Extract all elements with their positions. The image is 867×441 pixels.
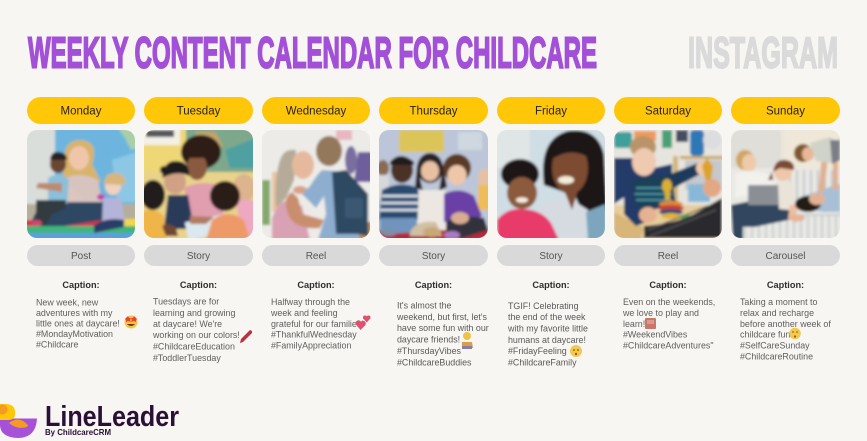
caption: Saturday: Caption: [649,280,687,290]
icon: book [645,318,656,329]
photo: Friday mother and daughter smiling [495,128,607,240]
caption: Thursday [396,280,489,368]
day: Thursday: Thursday [410,106,458,118]
logo wordmark: LineLeader [45,401,179,433]
caption: Wednesday: grateful for our families! [271,319,364,329]
caption: Tuesday [152,280,252,363]
day: Sunday [731,97,840,124]
photo: Monday teacher with toddlers [25,128,137,240]
caption: Saturday [622,280,715,350]
type: Story [497,245,605,266]
photo: Wednesday parent greeting child with backpack [260,128,372,240]
caption: Monday [36,280,138,350]
day: Sunday: Sunday [766,106,805,118]
day: Monday [27,97,135,124]
type: Story: Story [422,251,445,262]
caption: Wednesday: #FamilyAppreciation [271,340,351,350]
day: Tuesday [144,97,253,124]
logo mark [0,404,37,438]
type: Post: Post [71,251,91,262]
day: Wednesday: Wednesday [286,106,347,118]
day: Wednesday [262,97,370,124]
type: Post [27,245,135,266]
caption: Monday: little ones at daycare! [36,318,120,328]
caption: Tuesday: #ToddlerTuesday [153,353,221,363]
caption: Tuesday: working on our colors! [152,330,240,340]
photo: Sunday family on the sofa [729,128,842,241]
caption: Thursday: Caption: [415,280,452,290]
logo tagline: By ChildcareCRM [45,427,111,437]
caption: Monday: Caption: [62,280,100,290]
day: Friday: Friday [535,106,567,118]
caption: Sunday: #ChildcareRoutine [740,352,813,362]
caption: Friday: with my favorite little [507,324,588,334]
caption: Thursday: #ChildcareBuddies [397,358,472,368]
caption: Friday: TGIF! Celebrating [508,301,579,311]
type: Story: Story [539,251,563,262]
caption: Thursday: have some fun with our [397,323,489,333]
day: Saturday [614,97,722,124]
caption: Monday: adventures with my [36,308,113,318]
type: Story: Story [187,251,210,262]
caption: Sunday: Caption: [767,280,804,290]
caption: Monday: #MondayMotivation [36,329,113,339]
caption: Sunday: relax and recharge [740,308,814,318]
caption: Thursday: It's almost the [397,300,452,310]
icon: person with baby emoji [462,332,473,349]
type: Carousel: Carousel [765,251,806,262]
caption: Wednesday: #ThankfulWednesday [271,330,357,340]
caption: Friday: humans at daycare! [508,335,586,345]
icon: two hearts [356,316,370,330]
photo: Tuesday teacher and kids drawing [141,128,255,240]
icon: baby face emoji [570,345,582,357]
photo: Thursday three smiling kids [377,128,490,240]
caption: Tuesday: Caption: [180,280,217,290]
caption: Friday: the end of the week [508,312,586,322]
caption: Sunday: Taking a moment to [740,297,818,307]
caption: Monday: New week, new [36,298,99,308]
caption: Friday: #FridayFeeling [508,346,567,356]
type: Reel: Reel [658,251,678,262]
type: Carousel [731,245,840,266]
caption: Friday [507,280,588,368]
photo: Saturday toddler with stacking toy [612,128,724,240]
logo: LineLeader by ChildcareCRM [0,401,179,438]
caption: Monday: #Childcare [36,340,78,350]
caption: Thursday: daycare friends! [397,334,460,344]
caption: Saturday: learn! [623,319,645,329]
caption: Tuesday: #ChildcareEducation [153,342,235,352]
caption: Wednesday: Halfway through the [271,297,350,307]
caption: Sunday [740,280,831,362]
caption: Saturday: #WeekendVibes [623,330,688,340]
caption: Saturday: we love to play and [622,308,699,318]
caption: Wednesday [270,280,370,350]
caption: Saturday: Even on the weekends, [623,297,715,307]
caption: Tuesday: Tuesdays are for [153,296,219,306]
caption: Saturday: #ChildcareAdventures" [623,340,713,350]
caption: Thursday: #ThursdayVibes [397,346,462,356]
type: Reel [262,245,370,266]
caption: Friday: Caption: [532,280,570,290]
type: Story [144,245,253,266]
caption: Tuesday: learning and growing [153,308,235,318]
icon: star-struck emoji [124,316,138,328]
day: Monday: Monday [61,106,102,118]
caption: Wednesday: week and feeling [270,308,338,318]
type: Reel: Reel [306,251,326,262]
caption: Sunday: #SelfCareSunday [740,340,810,350]
day: Thursday [379,97,488,124]
caption: Thursday: weekend, but first, let's [396,312,488,322]
icon: sleeping face emoji [789,328,801,339]
day: Saturday: Saturday [645,106,691,118]
type pills [27,245,840,266]
caption: Tuesday: at daycare! We're [153,319,222,329]
caption: Sunday: childcare fun! [740,330,793,340]
icon: crayon [240,330,252,343]
day: Tuesday: Tuesday [177,106,221,118]
type: Story [379,245,488,266]
caption: Sunday: before another week of [740,319,831,329]
caption: Friday: #ChildcareFamily [508,358,577,368]
type: Reel [614,245,722,266]
day: Friday [497,97,605,124]
day pills [27,97,840,124]
caption: Wednesday: Caption: [297,280,335,290]
